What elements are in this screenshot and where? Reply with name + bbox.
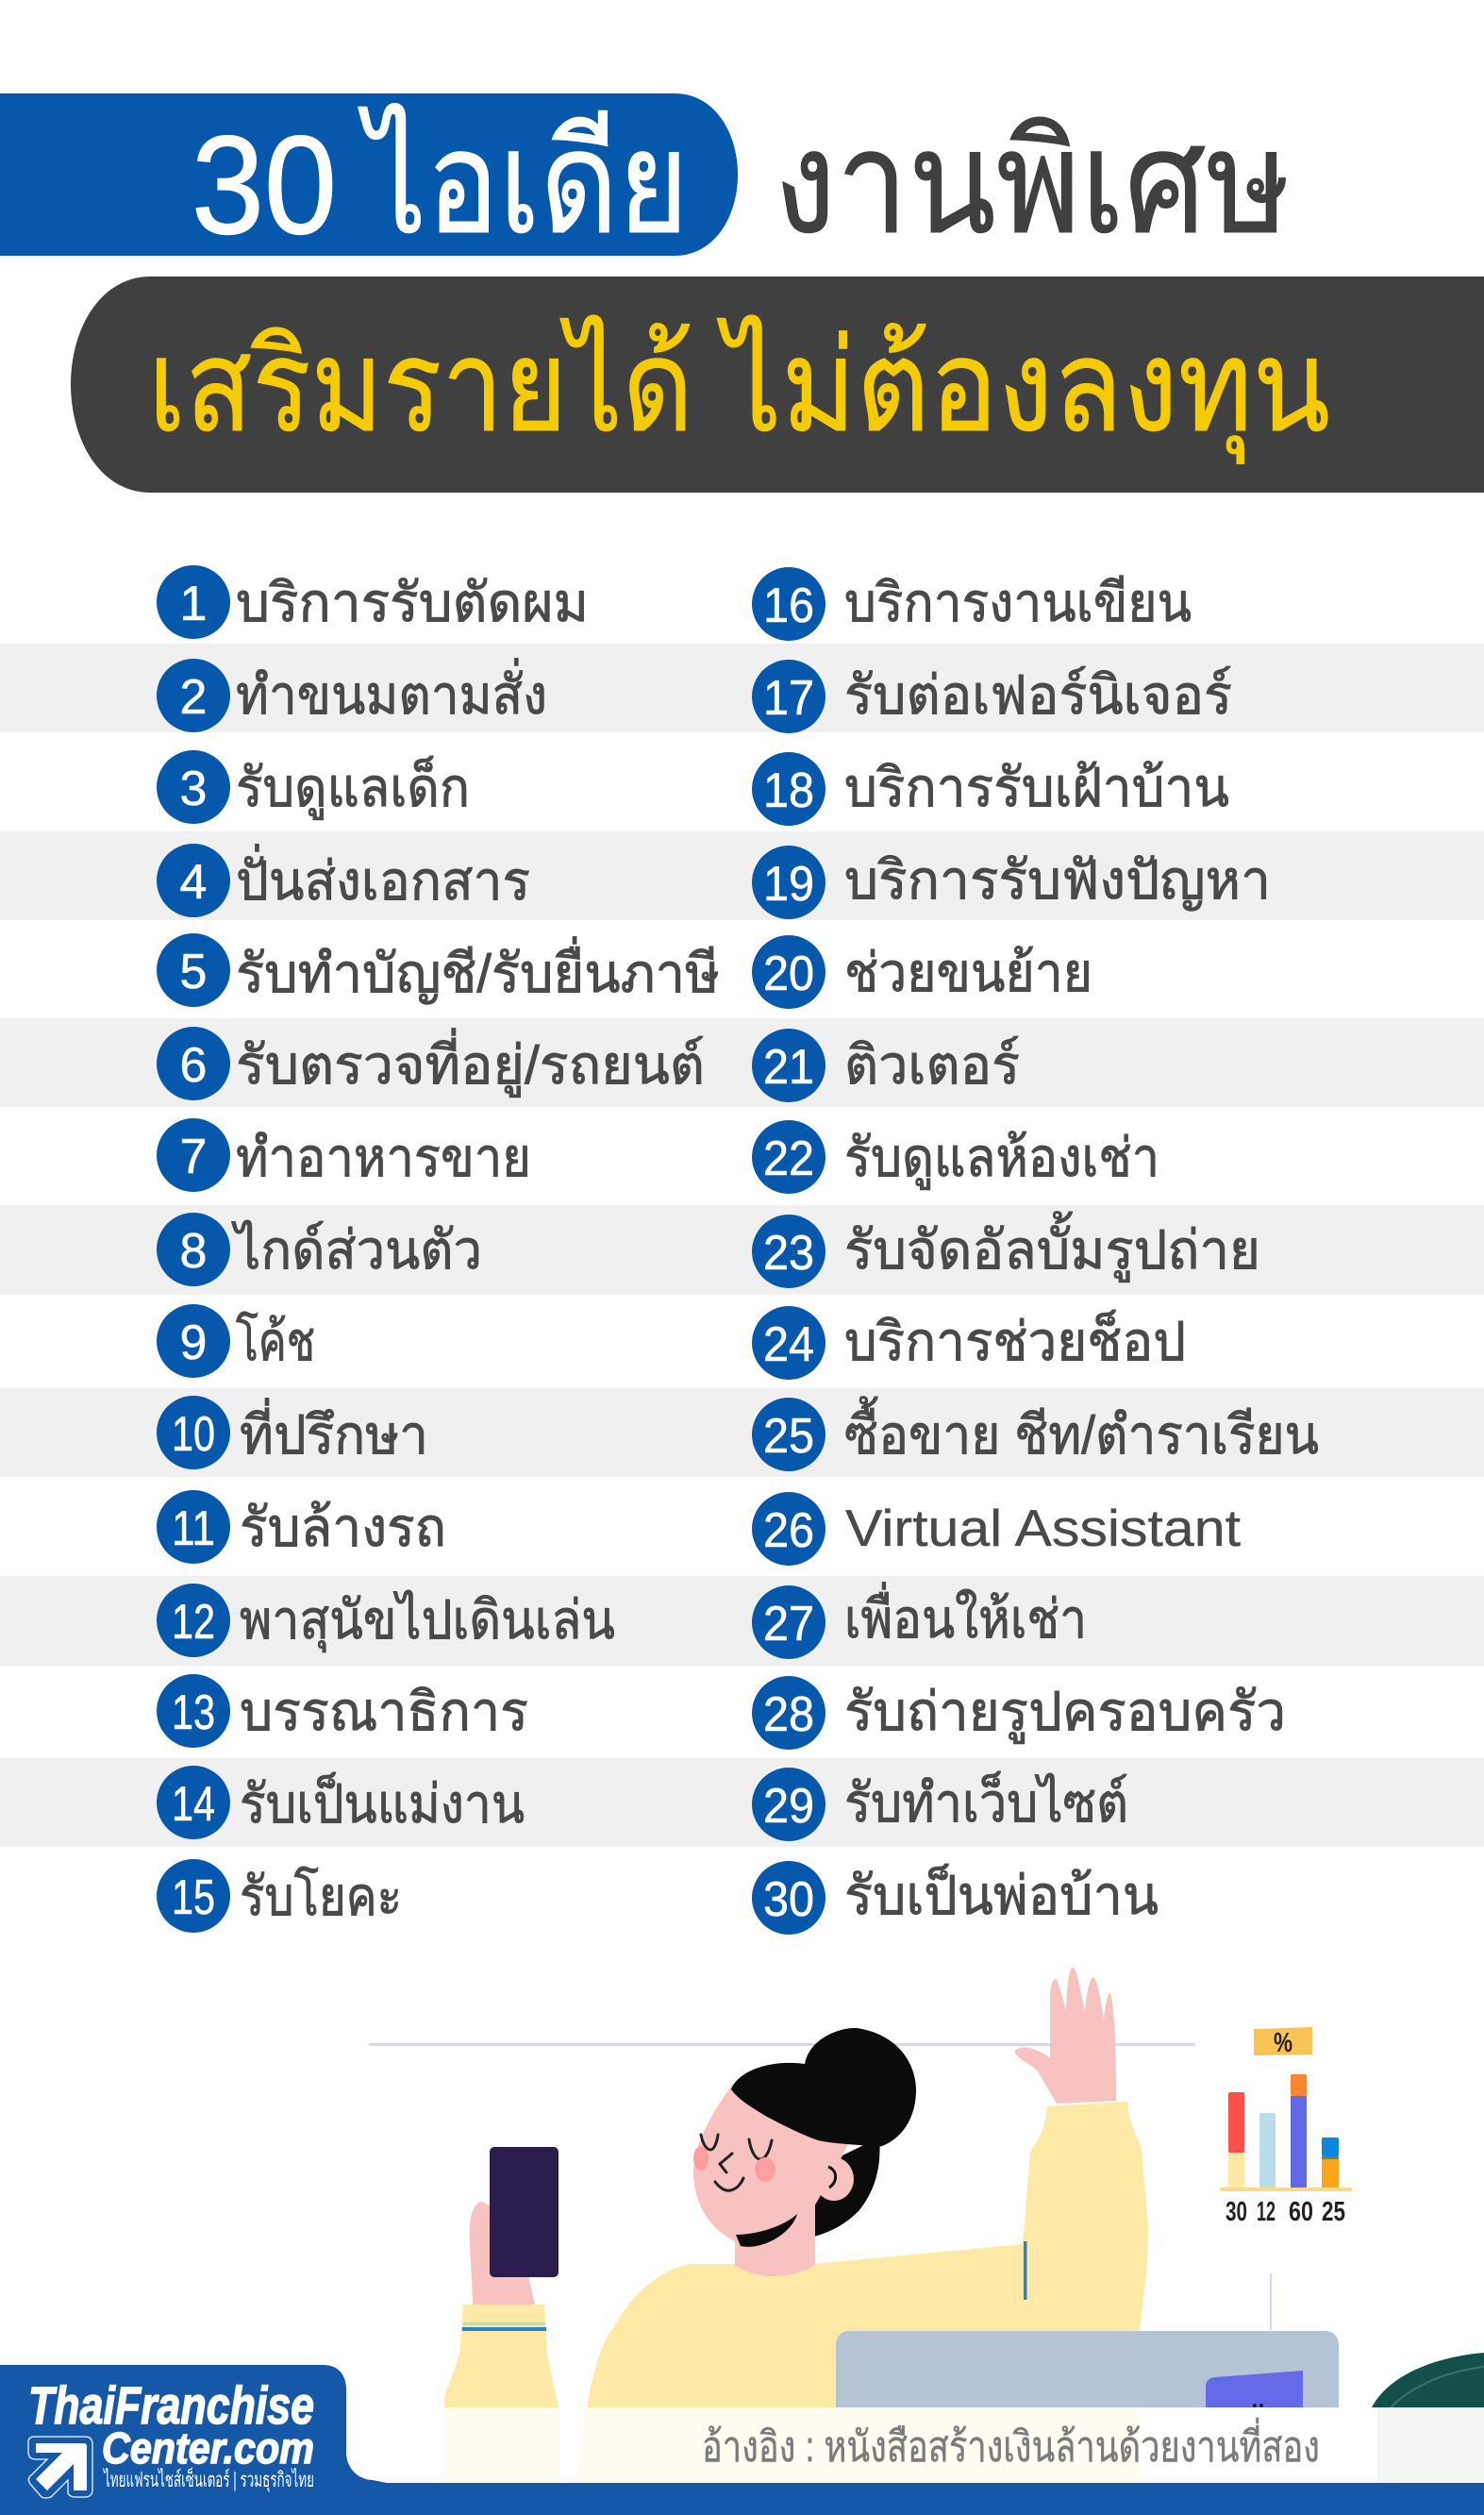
logo arrow icon (28, 2437, 92, 2498)
item 28: รับถ่ายรูปครอบครัว (844, 1682, 1286, 1744)
title text: ideas: ไอเดีย (358, 103, 689, 263)
percent tag (1254, 2027, 1312, 2058)
item 1 (157, 565, 589, 639)
item 24 (752, 1306, 1186, 1380)
item 22: รับดูแลห้องเช่า (844, 1128, 1159, 1190)
item 16: บริการงานเขียน (844, 573, 1192, 633)
cheeks (693, 2146, 775, 2182)
item 24: 24 (763, 1317, 814, 1372)
item 5: รับทำบัญชี/รับยื่นภาษี (236, 936, 720, 1004)
item 9 (157, 1304, 315, 1378)
item 6: 6 (180, 1038, 207, 1093)
item 6 (157, 1027, 705, 1100)
item 26: 26 (763, 1503, 814, 1558)
item 21: 21 (763, 1040, 814, 1095)
item 13: 13 (172, 1685, 215, 1740)
item 28: 28 (763, 1687, 814, 1742)
logo text: Center.com: Center.com (102, 2423, 314, 2473)
item 22 (752, 1120, 1159, 1194)
item 7: 7 (180, 1130, 207, 1184)
logo tagline: ไทยแฟรนไชส์เซ็นเตอร์ | รวมธุรกิจไทย (103, 2466, 314, 2492)
alternating row bands (0, 644, 1484, 1847)
left sleeve (444, 2305, 560, 2483)
subtitle text: no investment: ไม่ต้องลงทุน (717, 314, 1330, 464)
item 30 (752, 1861, 1159, 1935)
item 8: ไกด์ส่วนตัว (231, 1219, 482, 1281)
bar 30 (1228, 2092, 1244, 2188)
item 3 (157, 750, 470, 824)
item 16: 16 (763, 578, 814, 633)
item 26 (752, 1492, 1241, 1566)
item 20 (752, 935, 1092, 1009)
item 19 (752, 846, 1271, 919)
item 9: โค้ช (236, 1311, 315, 1372)
item 10: 10 (172, 1407, 215, 1462)
title number: 30: 30 (192, 108, 337, 263)
item 30: 30 (763, 1872, 814, 1927)
chart labels (1226, 2197, 1345, 2227)
item 4 (157, 844, 530, 917)
chart baseline (1220, 2188, 1352, 2191)
item 1: บริการรับตัดผม (236, 573, 589, 633)
title block (0, 93, 1484, 493)
bar 25 (1322, 2138, 1339, 2188)
item 10: ที่ปรึกษา (240, 1398, 428, 1466)
item 8: 8 (180, 1224, 207, 1279)
item 27 (752, 1582, 1087, 1659)
item 7: ทำอาหารขาย (236, 1128, 531, 1188)
item 10 (157, 1396, 428, 1469)
item 22: 22 (763, 1132, 814, 1186)
item 29: 29 (763, 1779, 814, 1834)
item 8 (157, 1213, 482, 1286)
item 21 (752, 1029, 1020, 1102)
raised hand (1014, 1968, 1116, 2104)
logo (28, 2375, 314, 2498)
facial features (701, 2135, 772, 2190)
hand holding phone (470, 2202, 535, 2305)
ear detail (828, 2167, 836, 2188)
item 14: รับเป็นแม่งาน (240, 1771, 525, 1835)
sticker dots (1253, 2404, 1263, 2407)
laptop sticker (1206, 2371, 1303, 2407)
antenna line (1270, 2273, 1272, 2330)
item 26: Virtual Assistant (845, 1499, 1241, 1557)
bar 60 (1291, 2074, 1307, 2188)
item 12 (157, 1584, 615, 1657)
item 7 (157, 1118, 531, 1192)
list: left column, items 1 to 15 (157, 565, 720, 1933)
ear (814, 2157, 854, 2201)
item 11: รับล้างรถ (240, 1498, 446, 1558)
item 23: 23 (763, 1226, 814, 1281)
logo text: ThaiFranchise: ThaiFranchise (28, 2375, 314, 2435)
chin shadow (736, 2214, 797, 2247)
hair back (811, 2138, 880, 2237)
plant highlight (1391, 2367, 1484, 2407)
subtitle banner: dark (71, 277, 1484, 493)
sleeve seam (1024, 2241, 1026, 2300)
item 30: รับเป็นพ่อบ้าน (844, 1863, 1159, 1926)
source text: อ้างอิง : หนังสือสร้างเงินล้านด้วยงานที่สอง (702, 2417, 1320, 2471)
item 9: 9 (180, 1316, 207, 1370)
chart labels: 30 (1226, 2197, 1247, 2227)
item 16 (752, 567, 1192, 641)
bar chart (1220, 2027, 1352, 2227)
item 25 (752, 1397, 1319, 1471)
item 15 (157, 1859, 402, 1933)
item 18: 18 (763, 763, 814, 818)
item 20: 20 (763, 947, 814, 1001)
title text: side jobs: งานพิเศษ (774, 103, 1291, 263)
source strip right tint (1377, 2407, 1484, 2483)
item 6: รับตรวจที่อยู่/รถยนต์ (236, 1028, 705, 1098)
item 3: รับดูแลเด็ก (236, 755, 470, 820)
item 2 (157, 658, 547, 732)
item 5 (157, 933, 720, 1007)
item 15: รับโยคะ (240, 1866, 402, 1927)
item 12: พาสุนัขไปเดินเล่น (240, 1589, 615, 1653)
item 2: 2 (180, 670, 207, 725)
source strip (444, 2407, 1484, 2483)
item 20: ช่วยขนย้าย (844, 943, 1092, 1003)
item 25: 25 (763, 1409, 814, 1464)
item 5: 5 (180, 945, 207, 999)
phone (490, 2147, 559, 2277)
item 18 (752, 752, 1229, 826)
bar 12 (1259, 2113, 1276, 2188)
item 17 (752, 660, 1232, 733)
item 2: ทำขนมตามสั่ง (236, 658, 547, 726)
title banner: blue (0, 93, 738, 256)
item 23: รับจัดอัลบั้มรูปถ่าย (844, 1212, 1260, 1283)
item 29 (752, 1768, 1128, 1841)
hair front and bun (731, 2028, 916, 2147)
bottom bar and logo panel (0, 2365, 1484, 2515)
item 1: 1 (180, 577, 207, 631)
chart labels: 25 (1322, 2197, 1345, 2227)
item 24: บริการช่วยช็อป (844, 1309, 1186, 1372)
item 19: บริการรับฟังปัญหา (844, 850, 1271, 911)
item 12: 12 (172, 1595, 215, 1650)
item 11: 11 (172, 1501, 215, 1556)
chart labels: 12 (1257, 2197, 1276, 2227)
item 17: 17 (763, 671, 814, 726)
item 19: 19 (763, 857, 814, 912)
item 4: ปั่นส่งเอกสาร (236, 844, 530, 912)
item 13: บรรณาธิการ (240, 1682, 528, 1742)
item 14: 14 (172, 1777, 215, 1832)
chart labels: 60 (1289, 2197, 1313, 2227)
item 13 (157, 1674, 528, 1748)
item 23 (752, 1212, 1260, 1288)
illustration: woman with phone and laptop (369, 1968, 1484, 2483)
subtitle text: earn extra income: เสริมรายได้ (148, 314, 693, 458)
item 14 (157, 1766, 525, 1839)
footer (0, 2365, 1484, 2515)
laptop (836, 2331, 1339, 2407)
percent tag: % (1274, 2028, 1292, 2058)
item 21: ติวเตอร์ (844, 1035, 1020, 1096)
item 27: เพื่อนให้เช่า (844, 1582, 1087, 1650)
plant shape (1372, 2353, 1484, 2407)
sweater: body and raised arm (577, 2102, 1148, 2483)
item 29: รับทำเว็บไซต์ (844, 1770, 1128, 1834)
neck (735, 2199, 815, 2276)
left cuff stripes (462, 2322, 546, 2331)
face (693, 2084, 849, 2244)
wall line (369, 2043, 1195, 2046)
item 15: 15 (172, 1870, 215, 1925)
item 4: 4 (180, 855, 207, 910)
item 11 (157, 1490, 446, 1564)
item 17: รับต่อเฟอร์นิเจอร์ (844, 665, 1232, 726)
item 27: 27 (763, 1597, 814, 1652)
item 3: 3 (180, 762, 207, 816)
item 28 (752, 1676, 1286, 1750)
list: right column, items 16 to 30 (752, 567, 1319, 1935)
item 18: บริการรับเฝ้าบ้าน (844, 758, 1229, 818)
item 25: ซื้อขาย ชีท/ตำราเรียน (844, 1397, 1319, 1466)
